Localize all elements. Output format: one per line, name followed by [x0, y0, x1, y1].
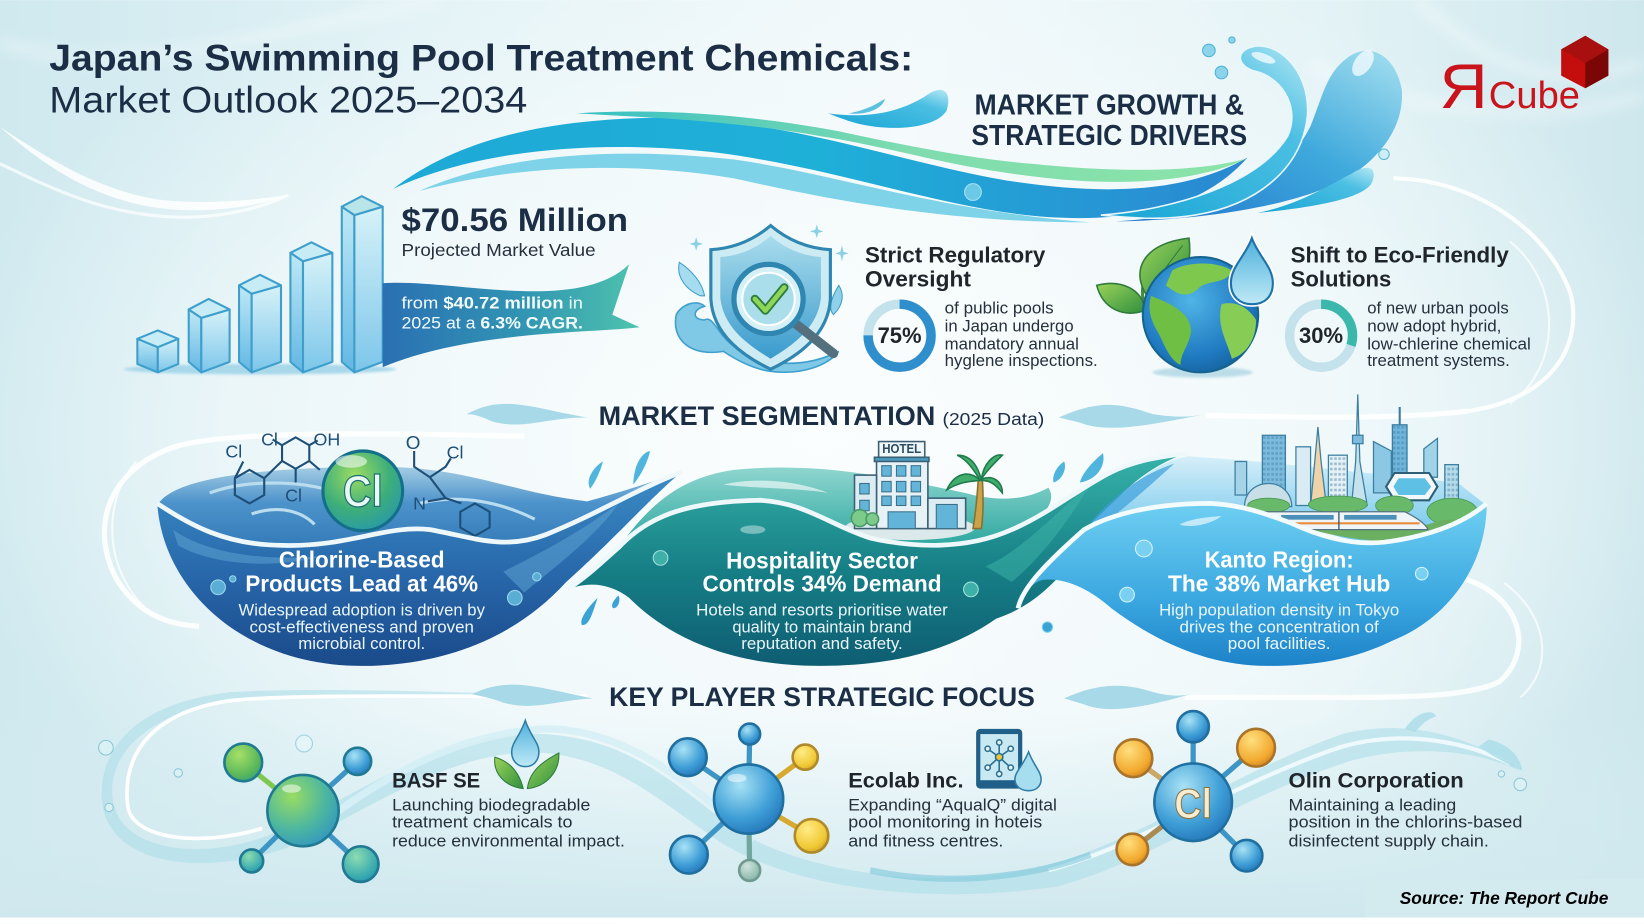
panel: kanto region: pool facilities. [1228, 634, 1331, 653]
panel: shift to eco-friendly solutions: Shift to Eco-Friendly [1291, 242, 1510, 267]
panel: strict regulatory oversight: hyglene inspections. [945, 351, 1098, 370]
panel: strict regulatory oversight: Strict Regulatory [865, 242, 1046, 267]
panel: chlorine-based products: cost-effectiveness and proven [250, 617, 474, 636]
icon: chlorine orb [323, 451, 403, 531]
logo: RCube [1440, 36, 1608, 122]
panel: BASF SE: treatment chamicals to [392, 812, 572, 831]
panel: shift to eco-friendly solutions [1290, 242, 1531, 370]
panel: hospitality sector: Controls 34% Demand [702, 570, 942, 596]
title: Market Outlook 2025–2034 [49, 79, 527, 120]
panel: Ecolab Inc.: Ecolab Inc. [848, 770, 964, 793]
panel: Ecolab Inc.: Expanding “AqualQ” digital [848, 796, 1057, 815]
icon: globe with leaf and drop [1097, 238, 1273, 378]
panel: hospitality sector: Hotels and resorts prioritise water [696, 601, 948, 620]
panel: shift to eco-friendly solutions: low-chlerine chemical [1367, 334, 1531, 353]
panel: shift to eco-friendly solutions: Solutions [1291, 266, 1391, 291]
donut chart: 30% [1290, 304, 1353, 367]
icon: hotel and palm [851, 442, 1002, 529]
water swoosh [393, 37, 1402, 222]
panel: key player water ribbon [99, 690, 1527, 894]
panel: kanto region: High population density in Tokyo [1159, 601, 1399, 620]
panel: kanto region: The 38% Market Hub [1168, 570, 1390, 596]
panel: chlorine-based products: Cl [285, 485, 302, 505]
panel: chlorine-based products: Cl [447, 442, 463, 462]
market value stat [402, 202, 628, 260]
icon: chlorine orb: Cl [343, 468, 383, 517]
icon: blue and yellow molecule [669, 724, 828, 881]
panel: BASF SE: reduce environmental impact. [392, 831, 625, 850]
icon: chlorine molecule: Cl [1174, 780, 1212, 827]
panel: strict regulatory oversight: Oversight [865, 266, 972, 291]
panel: chlorine-based products: Widespread adoption is driven by [239, 601, 486, 620]
section heading: key player strategic focus: KEY PLAYER STRATEGIC FOCUS [609, 681, 1035, 712]
panel: chlorine-based products: microbial control. [298, 634, 425, 653]
bar chart: crystal growth bars [124, 196, 396, 374]
panel: chlorine-based products: N [413, 494, 426, 514]
panel: Ecolab Inc.: pool monitoring in hoteis [848, 812, 1042, 831]
icon: shield with magnifier [675, 225, 849, 372]
title [49, 37, 913, 120]
icon: green molecule [224, 744, 378, 882]
panel: shift to eco-friendly solutions: treatment systems. [1367, 351, 1510, 370]
panel: kanto region: Kanto Region: [1205, 546, 1354, 572]
section heading: market growth: STRATEGIC DRIVERS [971, 119, 1247, 151]
section heading: market growth: MARKET GROWTH & [975, 88, 1244, 120]
panel: chlorine-based products: Cl [261, 430, 278, 450]
panel: Olin Corporation: Maintaining a leading [1289, 796, 1456, 815]
panel: strict regulatory oversight: mandatory annual [945, 334, 1079, 353]
section heading: market segmentation: (2025 Data) [943, 409, 1044, 429]
panel: kanto region: drives the concentration of [1180, 617, 1379, 636]
panel: chlorine-based products [157, 430, 682, 666]
logo: RCube: Я [1440, 52, 1488, 122]
ribbon: CAGR callout [383, 264, 640, 367]
panel: chlorine-based products: OH [313, 430, 340, 450]
icon: tablet and drop [976, 729, 1041, 791]
panel: strict regulatory oversight: in Japan undergo [945, 316, 1074, 335]
panel: chlorine-based products: Chlorine-Based [279, 546, 445, 572]
panel: BASF SE: Launching biodegradable [392, 796, 590, 815]
panel: Olin Corporation [1115, 711, 1522, 871]
ribbon: CAGR callout: from $40.72 million in [402, 293, 583, 312]
panel: Olin Corporation: position in the chlorins-based [1289, 812, 1522, 831]
title: Japan’s Swimming Pool Treatment Chemicals: [49, 37, 913, 78]
section heading: market growth [971, 88, 1247, 151]
donut chart: 75% [868, 304, 931, 367]
panel: chlorine-based products: Products Lead at 46% [245, 570, 478, 596]
panel: shift to eco-friendly solutions: now adopt hybrid, [1367, 316, 1501, 335]
market value stat: Projected Market Value [402, 240, 596, 260]
panel: Olin Corporation: Olin Corporation [1289, 770, 1464, 793]
icon: chlorine molecule [1115, 711, 1275, 871]
panel: hospitality sector: quality to maintain brand [732, 617, 912, 636]
panel: strict regulatory oversight: of public pools [945, 299, 1054, 318]
source note [1365, 879, 1644, 918]
panel: kanto region [1018, 394, 1487, 666]
panel: Ecolab Inc.: and fitness centres. [848, 831, 1003, 850]
icon: Tokyo skyline and train [1235, 394, 1477, 541]
bottom margin [0, 918, 1644, 924]
panel: chlorine-based products: O [406, 432, 420, 453]
source note: Source: The Report Cube [1400, 888, 1608, 908]
section heading: key player strategic focus [472, 681, 1190, 712]
ribbon: CAGR callout: 2025 at a 6.3% CAGR. [402, 313, 583, 332]
icon: hotel and palm: HOTEL [882, 442, 921, 456]
panel: Olin Corporation: disinfectent supply chain. [1289, 831, 1489, 850]
panel: chlorine-based products: Cl [225, 441, 242, 461]
icon: drop and leaves [495, 720, 559, 789]
icon: chemical structures [235, 437, 490, 536]
panel: hospitality sector: reputation and safety. [741, 634, 903, 653]
section heading: market segmentation: MARKET SEGMENTATION [599, 400, 935, 431]
panel: hospitality sector: Hospitality Sector [726, 547, 918, 573]
panel: BASF SE: BASF SE [392, 770, 480, 793]
panel: hospitality sector [567, 442, 1188, 666]
panel: Ecolab Inc. [669, 724, 1057, 881]
donut chart: 30%: 30% [1299, 323, 1343, 348]
logo: RCube: Cube [1489, 74, 1580, 116]
section heading: market segmentation [467, 400, 1206, 431]
panel: strict regulatory oversight [865, 242, 1098, 370]
panel: shift to eco-friendly solutions: of new urban pools [1367, 299, 1509, 318]
donut chart: 75%: 75% [878, 323, 922, 348]
panel: BASF SE [224, 720, 625, 882]
market value stat: $70.56 Million [402, 202, 628, 238]
